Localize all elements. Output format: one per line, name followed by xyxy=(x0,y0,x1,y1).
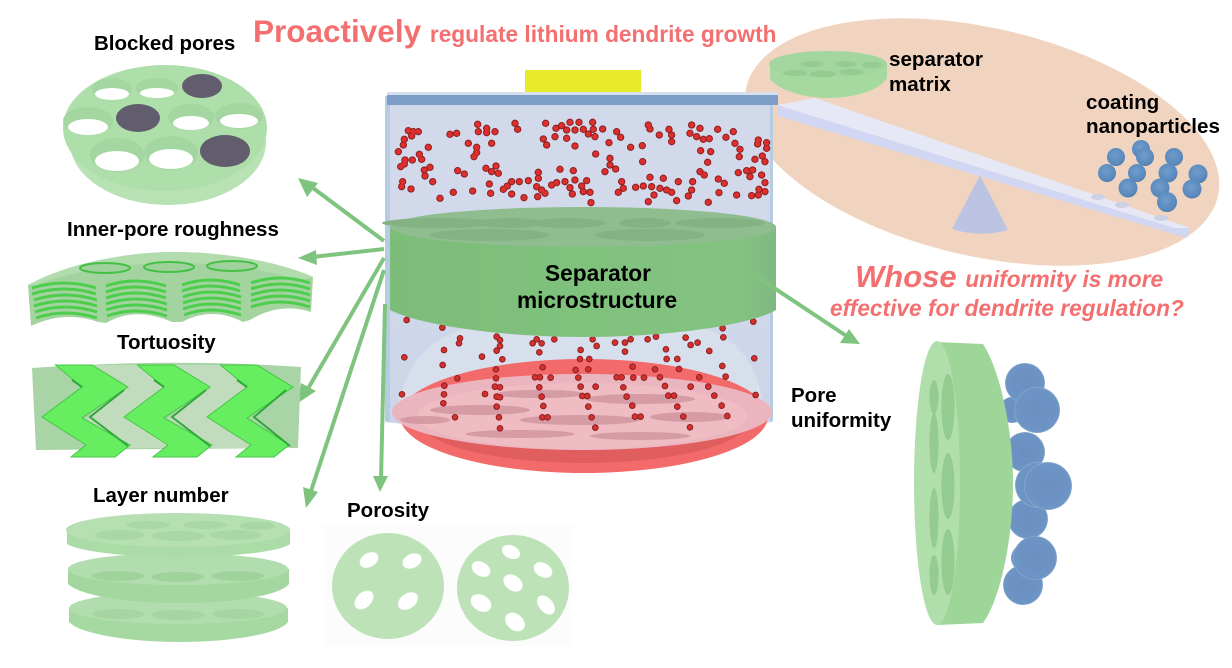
question heading: uniformity is more xyxy=(965,266,1163,292)
light channels xyxy=(86,365,290,448)
panel: inner-pore roughness xyxy=(28,218,313,326)
cell walls xyxy=(385,96,773,422)
label: coating nanoparticles: coating xyxy=(1086,91,1159,114)
panel: central battery cell xyxy=(382,70,778,473)
lithium ions above separator xyxy=(398,122,767,203)
arrow: to porosity xyxy=(373,304,388,492)
label: separator matrix: separator xyxy=(889,48,983,71)
lithium metal anode xyxy=(392,359,772,473)
faint backing xyxy=(323,525,572,646)
label: Tortuosity xyxy=(117,331,216,354)
blocked pore plugs xyxy=(116,74,250,167)
coating nanoparticles xyxy=(1098,140,1208,212)
panel: layer number xyxy=(66,484,290,642)
label: Inner-pore roughness xyxy=(67,218,279,241)
seesaw fulcrum cone xyxy=(952,175,1008,234)
label: Blocked pores xyxy=(94,32,235,55)
label: Layer number xyxy=(93,484,229,507)
label: separator matrix: matrix xyxy=(889,73,951,96)
disc 1 xyxy=(67,530,290,557)
panel: balance with peach ellipse xyxy=(721,0,1232,308)
cut disc with ridged pores xyxy=(28,252,313,326)
label: Pore xyxy=(791,384,837,407)
separator cylinder xyxy=(382,207,776,337)
panel: tortuosity xyxy=(32,331,301,457)
lower chamber dome xyxy=(395,325,765,418)
zigzag inner edges xyxy=(72,380,290,446)
panel: blocked pores xyxy=(63,32,267,205)
label: coating nanoparticles: nanoparticles xyxy=(1086,115,1220,138)
arrow: to inner-pore roughness xyxy=(298,249,384,265)
separator matrix disc xyxy=(769,51,887,98)
arrow: to blocked pores xyxy=(298,178,384,241)
arrow: to pore uniformity xyxy=(747,270,860,344)
low porosity disc xyxy=(332,533,444,639)
yellow top cap xyxy=(525,70,641,93)
label: separator microstructure: microstructure xyxy=(517,287,677,313)
disc 2 xyxy=(68,569,289,603)
arrows from cell xyxy=(298,178,860,508)
coated particles behind disc xyxy=(999,363,1072,605)
stacked discs xyxy=(66,513,290,642)
label: separator microstructure: Separator xyxy=(545,260,651,286)
disc 3 xyxy=(69,608,288,642)
seesaw plank xyxy=(777,98,1190,238)
side-on disc xyxy=(914,341,1013,625)
title: Proactively regulate lithium dendrite growth xyxy=(253,13,776,49)
panel: pore uniformity xyxy=(791,341,1072,625)
arrow: to tortuosity xyxy=(298,258,384,403)
cell body xyxy=(385,96,772,434)
green zigzag channels xyxy=(42,365,293,457)
question heading: effective for dendrite regulation? xyxy=(830,295,1184,321)
blue top plate xyxy=(387,92,778,105)
panel: porosity xyxy=(323,499,572,646)
membrane block xyxy=(32,363,301,450)
high porosity disc xyxy=(457,535,569,641)
perforated disc xyxy=(63,65,267,205)
label: Porosity xyxy=(347,499,430,522)
peach ellipse xyxy=(721,0,1232,308)
label: uniformity xyxy=(791,409,892,432)
arrow: to layer number xyxy=(303,270,384,508)
lithium ions below separator xyxy=(402,320,756,428)
question heading: Whose xyxy=(855,259,965,294)
